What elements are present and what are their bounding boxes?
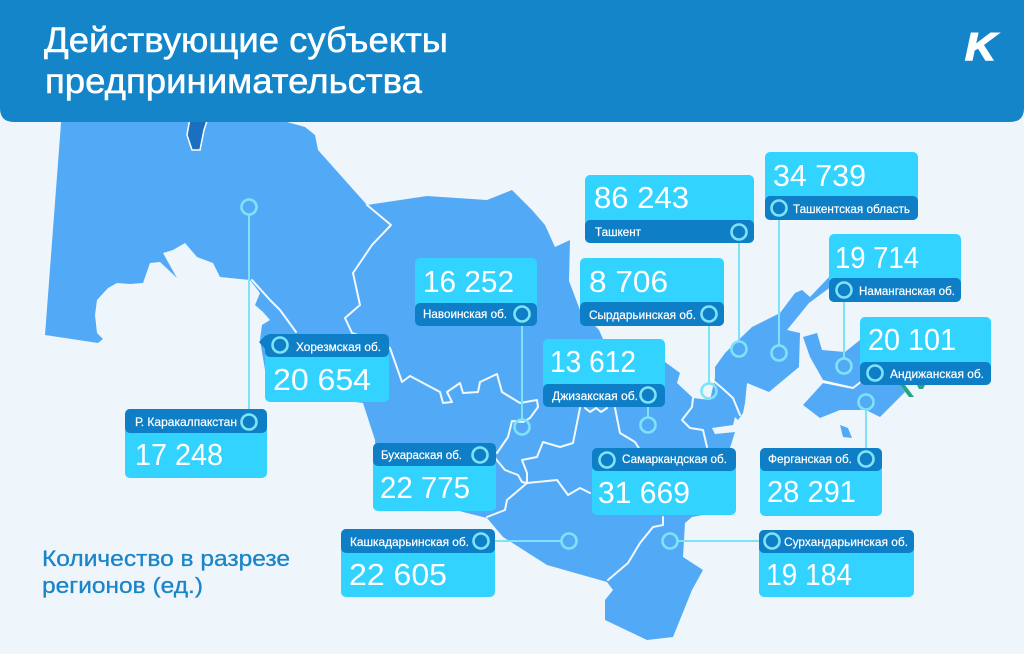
card: Сырдарьинская об.: 8 706 xyxy=(589,264,668,299)
card: Ташкент xyxy=(585,175,754,243)
card: Самаркандская об. xyxy=(592,448,736,515)
card: Ташкентская область: Ташкентская область xyxy=(793,204,910,216)
card: Р. Каракалпакстан: 17 248 xyxy=(135,437,223,472)
card: Наманганская об.: 19 714 xyxy=(835,240,919,275)
card: Ташкентская область: 34 739 xyxy=(773,158,866,193)
card: Сырдарьинская об.: Сырдарьинская об. xyxy=(589,310,696,322)
card: Ташкент: Ташкент xyxy=(595,227,642,239)
regional borders xyxy=(252,205,862,580)
Aral lake xyxy=(187,118,208,150)
card: Джизакская об. xyxy=(543,339,665,407)
card: Ферганская об.: 28 291 xyxy=(767,474,856,509)
card: Р. Каракалпакстан: Р. Каракалпакстан xyxy=(135,417,237,429)
card: Самаркандская об.: Самаркандская об. xyxy=(622,454,727,466)
card: Кашкадарьинская об.: 22 605 xyxy=(349,557,447,592)
legend note: Количество в разрезе xyxy=(42,546,290,571)
card: Сурхандарьинская об.: 19 184 xyxy=(766,557,852,592)
card: Хорезмская об. xyxy=(259,334,389,402)
card: Ташкент: 86 243 xyxy=(594,180,689,215)
card: Бухараская об.: 22 775 xyxy=(380,470,470,505)
map location markers xyxy=(242,200,874,548)
title xyxy=(44,21,448,101)
card: Сырдарьинская об. xyxy=(580,258,724,326)
card: Ташкентская область xyxy=(765,152,918,220)
card: Сурхандарьинская об. xyxy=(759,530,914,597)
card: Кашкадарьинская об.: Кашкадарьинская об. xyxy=(350,537,469,549)
Fergana region xyxy=(803,380,905,418)
card: Навоинская об. xyxy=(415,258,537,326)
card: Хорезмская об.: Хорезмская об. xyxy=(296,342,381,354)
card: Бухараская об. xyxy=(373,443,496,511)
legend note xyxy=(42,546,290,598)
card: Самаркандская об.: 31 669 xyxy=(598,475,690,510)
card: Джизакская об.: 13 612 xyxy=(550,344,636,379)
logo: K xyxy=(965,26,999,69)
card: Бухараская об.: Бухараская об. xyxy=(381,450,462,462)
Namangan region xyxy=(803,333,866,387)
card: Андижанская об.: Андижанская об. xyxy=(890,369,984,381)
card: Ферганская об. xyxy=(760,448,882,516)
card: Навоинская об.: 16 252 xyxy=(423,264,514,299)
card: Ферганская об.: Ферганская об. xyxy=(768,454,852,466)
card: Андижанская об.: 20 101 xyxy=(868,322,956,357)
main territory xyxy=(45,110,832,640)
legend note: регионов (ед.) xyxy=(42,573,203,598)
card: Кашкадарьинская об. xyxy=(341,529,495,597)
card: Джизакская об.: Джизакская об. xyxy=(552,391,638,403)
green border strip xyxy=(900,385,925,397)
title: Действующие субъекты xyxy=(44,21,448,60)
header band xyxy=(0,0,1024,122)
enclave xyxy=(840,425,852,438)
card: Р. Каракалпакстан xyxy=(125,409,267,478)
map of Uzbekistan xyxy=(45,110,925,640)
card: Наманганская об.: Наманганская об. xyxy=(859,286,955,298)
card: Сурхандарьинская об.: Сурхандарьинская об. xyxy=(784,537,908,549)
title: предпринимательства xyxy=(45,62,423,101)
card: Наманганская об. xyxy=(829,234,961,302)
connector lines xyxy=(249,215,866,541)
card: Андижанская об. xyxy=(860,317,991,385)
card: Навоинская об.: Навоинская об. xyxy=(423,309,507,321)
card: Хорезмская об.: 20 654 xyxy=(273,362,371,397)
